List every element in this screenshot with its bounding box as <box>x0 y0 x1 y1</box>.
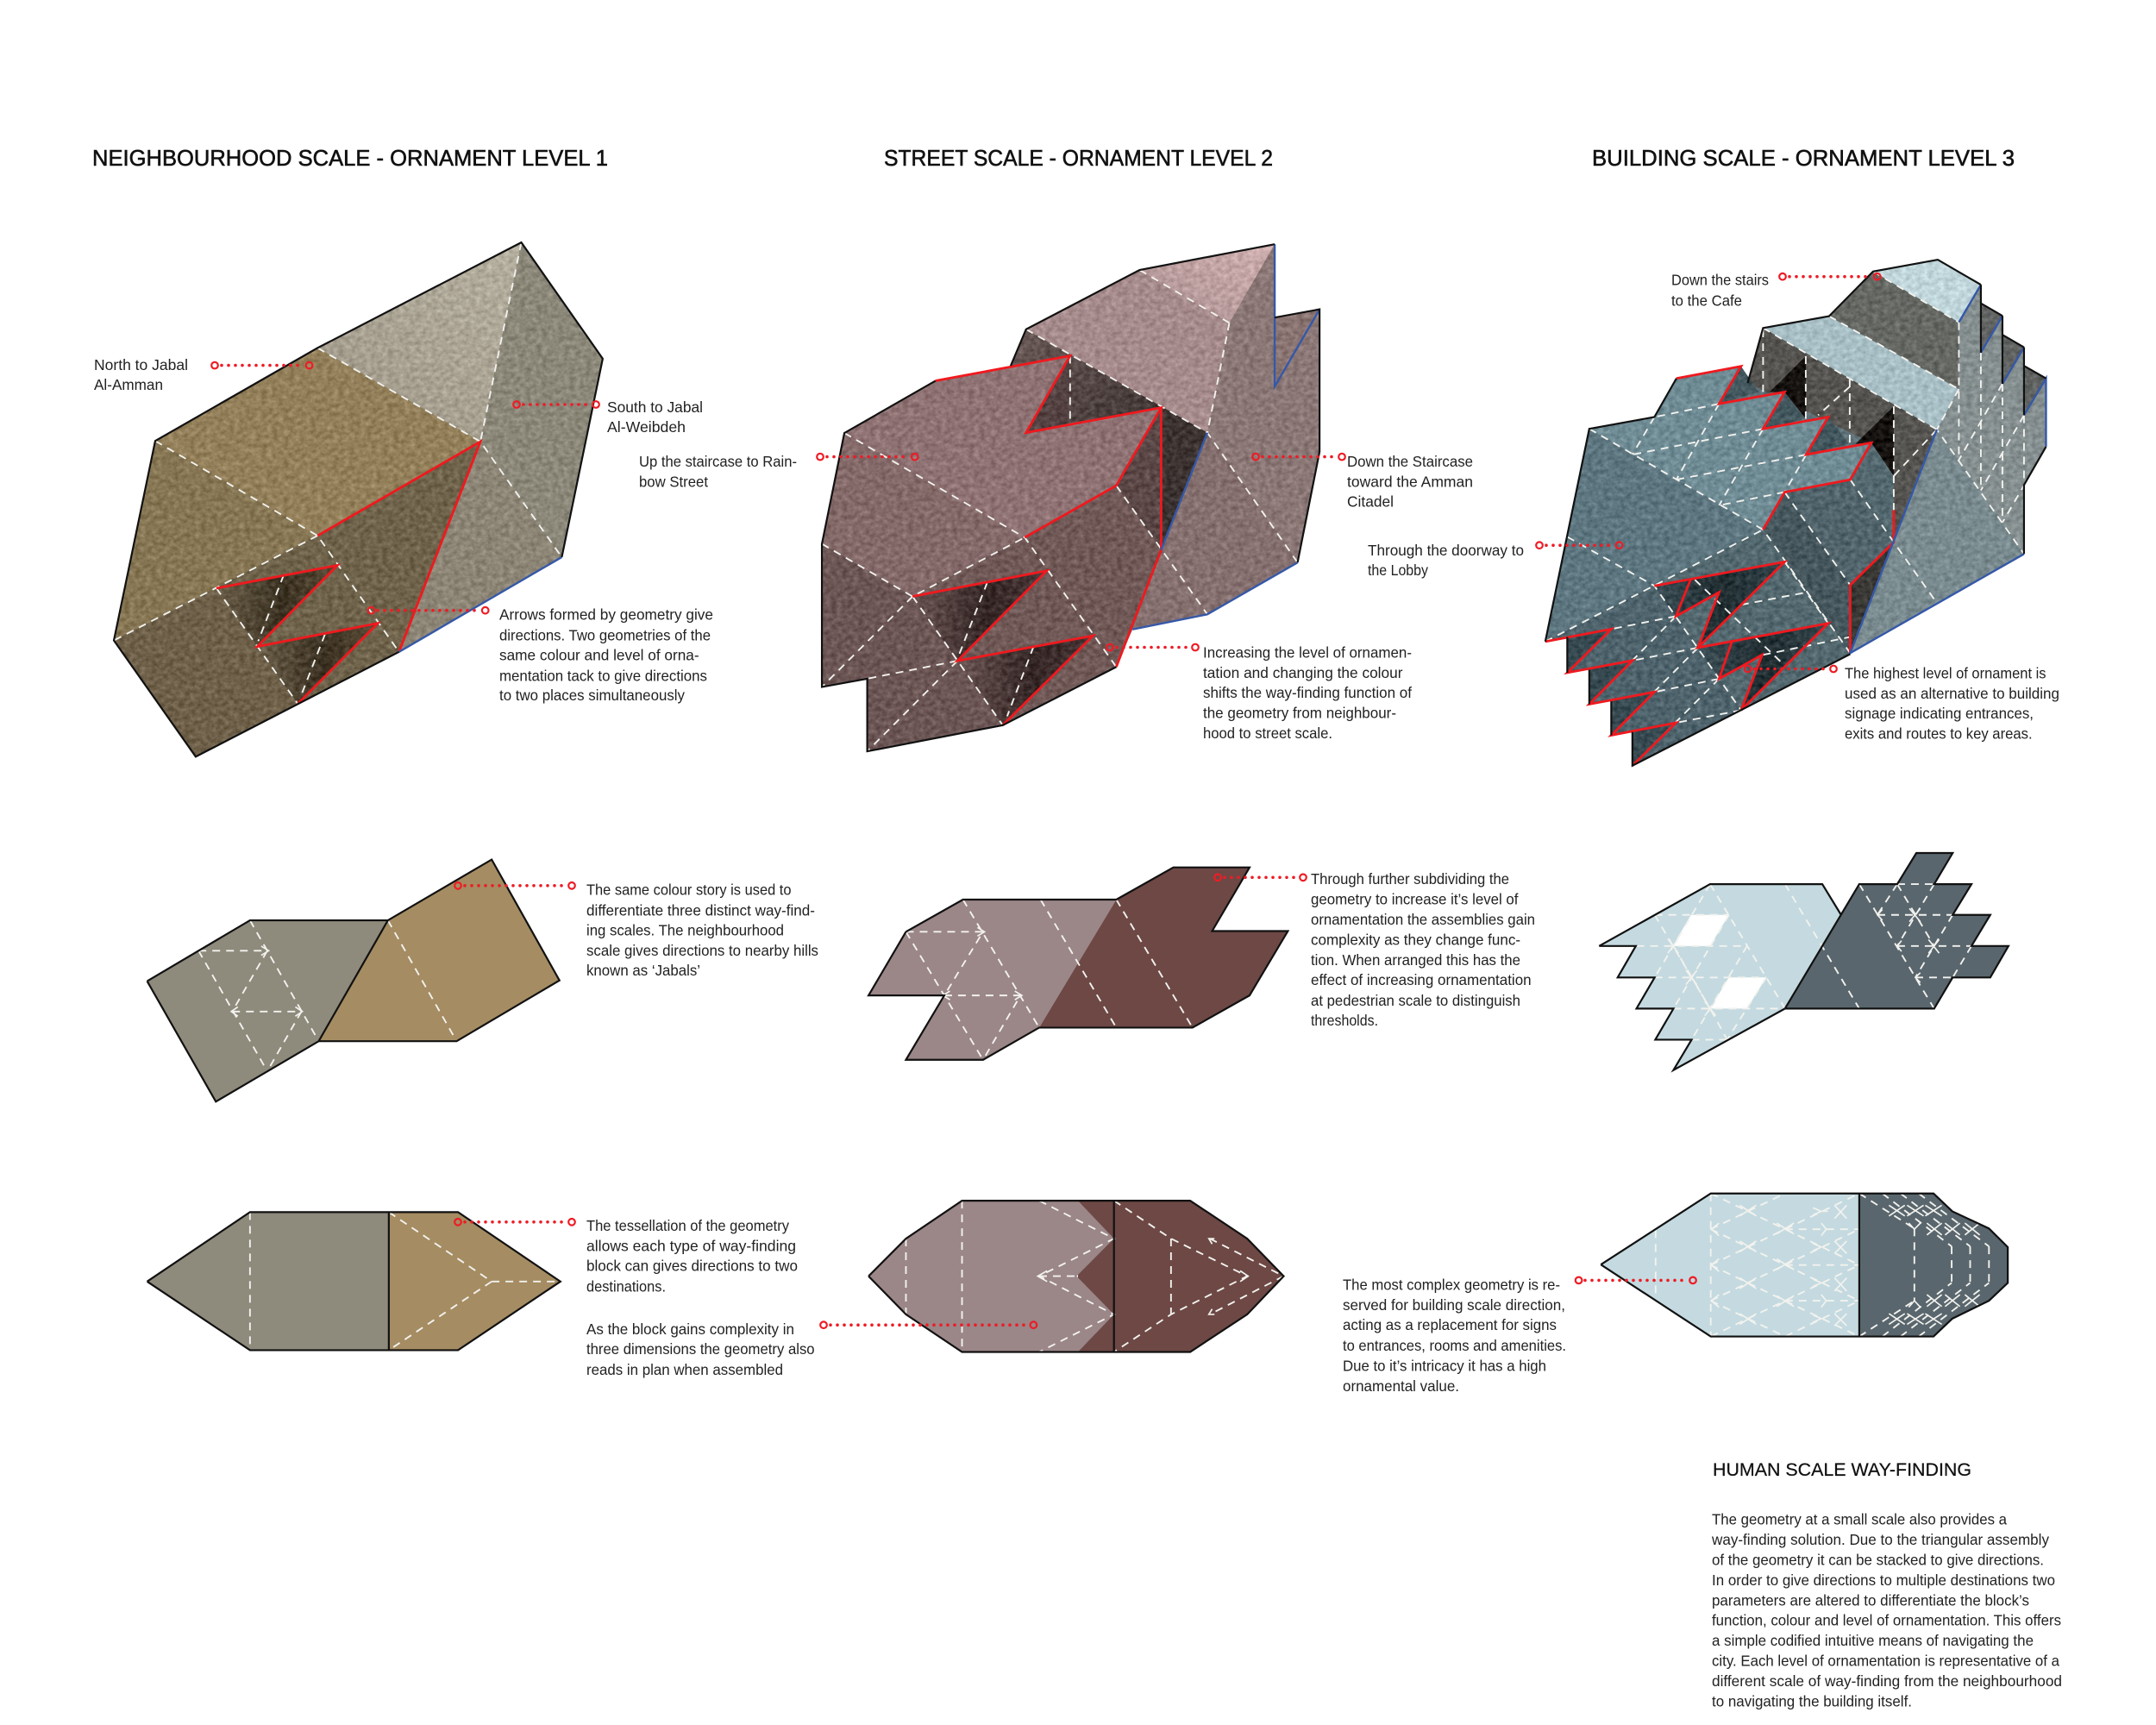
title: building scale: BUILDING SCALE - ORNAMENT LEVEL 3 <box>1592 145 2015 171</box>
callout: down the stairs to the cafe <box>1671 272 1880 310</box>
text block: human scale way-finding: function, colour and level of ornamentation. This offers <box>1712 1612 2061 1629</box>
text block: human scale way-finding <box>1711 1460 2062 1709</box>
callout: tessellation of the geometry: allows each type of way-finding <box>586 1238 796 1255</box>
callout: North to Jabal Al-Amman: North to Jabal <box>94 356 188 373</box>
callout: increasing the level of ornamentation: tation and changing the colour <box>1203 664 1403 681</box>
callout: up the staircase <box>639 453 918 490</box>
plan: building block, angled <box>1599 853 2009 1070</box>
callout: down the staircase: Down the Staircase <box>1347 453 1473 470</box>
callout: highest level of ornament: used as an alternative to building <box>1845 685 2059 702</box>
text block: human scale way-finding: In order to give directions to multiple destinations two <box>1712 1571 2055 1589</box>
text block: human scale way-finding: HUMAN SCALE WAY-FINDING <box>1713 1460 1971 1480</box>
callout: arrows formed by geometry: to two places simultaneously <box>499 687 685 704</box>
callout: highest level of ornament <box>1745 664 2059 743</box>
title: street scale: STREET SCALE - ORNAMENT LEVEL 2 <box>884 145 1273 171</box>
3D block: building scale, ornament level 3 <box>1545 260 2046 766</box>
plan: street block, tessellated <box>868 1201 1283 1352</box>
callout: further subdividing the geometry: complexity as they change func- <box>1311 931 1520 948</box>
callout: further subdividing the geometry: tion. When arranged this has the <box>1311 951 1520 969</box>
callout: increasing the level of ornamentation: the geometry from neighbour- <box>1203 705 1396 722</box>
callout: most complex geometry: Due to it’s intricacy it has a high <box>1343 1357 1546 1374</box>
callout: block gains complexity <box>586 1320 1037 1378</box>
callout: down the staircase <box>1252 453 1473 510</box>
callout: block gains complexity: three dimensions the geometry also <box>586 1340 815 1358</box>
callout: most complex geometry: to entrances, rooms and amenities. <box>1343 1337 1566 1354</box>
callout: same colour story: The same colour story is used to <box>586 881 792 899</box>
callout: South to Jabal Al-Weibdeh: South to Jabal <box>607 398 703 416</box>
text block: human scale way-finding: to navigating the building itself. <box>1712 1692 1912 1709</box>
text block: human scale way-finding: way-finding solution. Due to the triangular assembly <box>1711 1531 2049 1548</box>
callout: same colour story: ing scales. The neighbourhood <box>586 921 784 938</box>
callout: arrows formed by geometry: mentation tack to give directions <box>499 667 707 684</box>
plan: street block, angled <box>868 868 1288 1060</box>
callout: arrows formed by geometry: same colour and level of orna- <box>499 647 699 664</box>
callout: same colour story <box>454 881 818 979</box>
callout: most complex geometry: ornamental value. <box>1343 1377 1459 1395</box>
callout: increasing the level of ornamentation: Increasing the level of ornamen- <box>1203 643 1412 661</box>
3D block: street scale, ornament level 2 <box>822 244 1319 751</box>
callout: most complex geometry: served for building scale direction, <box>1343 1296 1565 1314</box>
callout: North to Jabal Al-Amman: Al-Amman <box>94 376 163 393</box>
callout: tessellation of the geometry <box>454 1217 798 1295</box>
callout: through the doorway: the Lobby <box>1368 561 1428 579</box>
callout: increasing the level of ornamentation <box>1106 643 1412 742</box>
callout: block gains complexity: As the block gains complexity in <box>586 1320 794 1338</box>
callout: South to Jabal Al-Weibdeh: Al-Weibdeh <box>607 418 686 436</box>
text block: human scale way-finding: different scale of way-finding from the neighbourhood <box>1712 1672 2062 1690</box>
callout: North to Jabal Al-Amman <box>94 356 312 393</box>
text block: human scale way-finding: a simple codified intuitive means of navigating the <box>1712 1632 2034 1649</box>
callout: further subdividing the geometry: Through further subdividing the <box>1311 870 1509 888</box>
callout: down the stairs to the cafe: to the Cafe <box>1671 292 1742 310</box>
callout: further subdividing the geometry: geometry to increase it’s level of <box>1311 890 1519 907</box>
callout: arrows formed by geometry: directions. Two geometries of the <box>499 626 711 643</box>
callout: through the doorway <box>1368 542 1622 579</box>
callout: South to Jabal Al-Weibdeh <box>513 398 703 436</box>
plan: neighbourhood block, tessellated <box>147 1212 561 1350</box>
callout: increasing the level of ornamentation: shifts the way-finding function of <box>1203 684 1412 701</box>
callout: highest level of ornament: The highest level of ornament is <box>1845 664 2046 681</box>
callout: tessellation of the geometry: The tessellation of the geometry <box>586 1217 789 1234</box>
text block: human scale way-finding: city. Each level of ornamentation is representative of a <box>1712 1653 2059 1670</box>
plan: neighbourhood block, angled <box>147 860 560 1101</box>
callout: arrows formed by geometry: Arrows formed by geometry give <box>499 606 713 624</box>
3D block: neighbourhood scale, ornament level 1 <box>114 242 603 756</box>
title: neighbourhood scale: NEIGHBOURHOOD SCALE - ORNAMENT LEVEL 1 <box>92 145 608 171</box>
callout: same colour story: scale gives directions to nearby hills <box>586 942 818 959</box>
callout: down the staircase: Citadel <box>1347 492 1394 510</box>
callout: further subdividing the geometry: effect of increasing ornamentation <box>1311 971 1532 988</box>
callout: arrows formed by geometry <box>368 606 713 704</box>
callout: tessellation of the geometry: block can gives directions to two <box>586 1258 798 1275</box>
callout: highest level of ornament: exits and routes to key areas. <box>1845 725 2033 743</box>
text block: human scale way-finding: parameters are altered to differentiate the block’s <box>1712 1591 2029 1609</box>
text block: human scale way-finding: The geometry at a small scale also provides a <box>1712 1511 2007 1528</box>
callout: up the staircase: Up the staircase to Rain- <box>639 453 797 470</box>
callout: most complex geometry: acting as a replacement for signs <box>1343 1316 1557 1333</box>
callout: further subdividing the geometry <box>1214 870 1535 1029</box>
callout: block gains complexity: reads in plan when assembled <box>586 1361 783 1378</box>
callout: through the doorway: Through the doorway to <box>1368 542 1524 559</box>
callout: further subdividing the geometry: ornamentation the assemblies gain <box>1311 911 1535 928</box>
text block: human scale way-finding: of the geometry it can be stacked to give directions. <box>1712 1551 2044 1568</box>
callout: tessellation of the geometry: destinations. <box>586 1277 666 1295</box>
callout: most complex geometry: The most complex geometry is re- <box>1343 1276 1560 1293</box>
plan: building block, tessellated <box>1601 1194 2008 1337</box>
callout: highest level of ornament: signage indicating entrances, <box>1845 705 2034 722</box>
dashed fold lines: building block <box>1545 272 2046 766</box>
callout: further subdividing the geometry: thresholds. <box>1311 1012 1378 1029</box>
callout: most complex geometry <box>1343 1276 1696 1395</box>
callout: increasing the level of ornamentation: hood to street scale. <box>1203 724 1332 742</box>
callout: down the stairs to the cafe: Down the stairs <box>1671 272 1769 289</box>
callout: up the staircase: bow Street <box>639 473 708 490</box>
callout: down the staircase: toward the Amman <box>1347 473 1473 490</box>
callout: same colour story: known as ‘Jabals’ <box>586 962 700 979</box>
callout: further subdividing the geometry: at pedestrian scale to distinguish <box>1311 992 1520 1009</box>
callout: same colour story: differentiate three distinct way-find- <box>586 901 815 919</box>
